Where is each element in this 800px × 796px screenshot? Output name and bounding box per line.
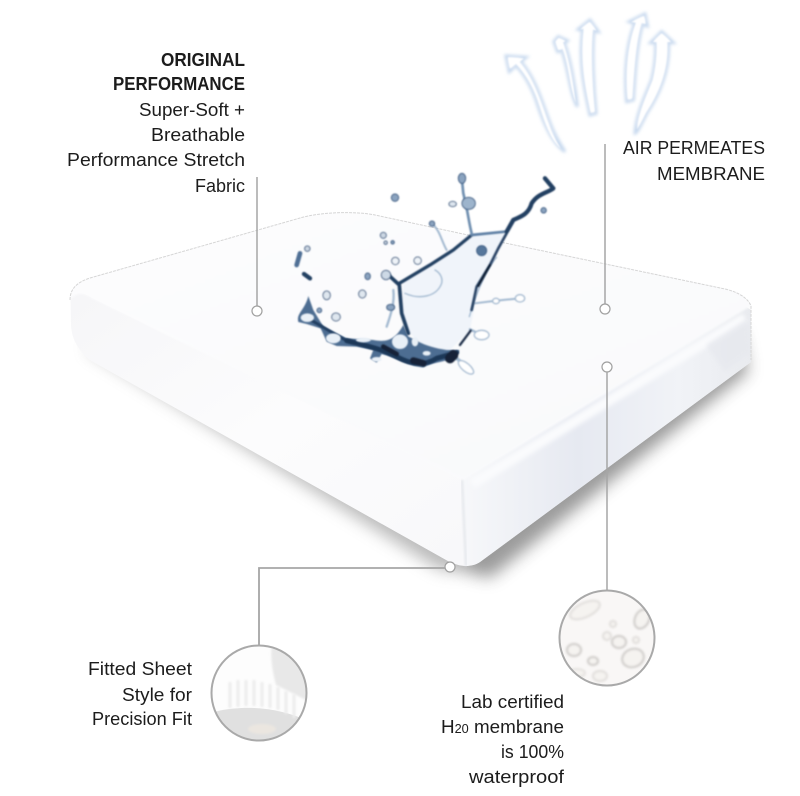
text: fitted sheet: [88, 658, 192, 729]
text: fabric description: Super-Soft +: [139, 99, 245, 120]
text: fabric description: Fabric: [195, 175, 245, 196]
text: air permeates membrane: [623, 137, 765, 184]
text: fitted sheet: Style for: [122, 684, 192, 705]
callout: waterproof membrane: [441, 362, 656, 787]
dot: mattress corner: [445, 562, 455, 572]
circle: droplets detail: [558, 590, 656, 688]
splash pale water fill: [402, 233, 507, 353]
leader line: fabric: [256, 177, 258, 306]
text: air permeates membrane: AIR PERMEATES: [623, 137, 765, 158]
leader line: fitted sheet: [259, 568, 445, 646]
text: waterproof membrane: H20 membrane: [441, 716, 564, 737]
text: fabric description: Performance Stretch: [67, 149, 245, 170]
callout: air permeates membrane: [600, 137, 765, 314]
text: waterproof membrane: [441, 691, 565, 787]
heading: original performance: [113, 49, 245, 94]
air arrows: [506, 14, 673, 152]
water splash: [297, 173, 553, 376]
splash light outline: [387, 223, 525, 376]
leader line: air: [604, 144, 606, 304]
mattress body: [70, 213, 751, 566]
dot: fabric: [252, 306, 262, 316]
text: air permeates membrane: MEMBRANE: [657, 163, 765, 184]
mattress: [70, 213, 751, 578]
splash highlights: [301, 313, 431, 362]
splash dark streams: [297, 178, 553, 363]
dot: membrane: [602, 362, 612, 372]
text: waterproof membrane: Lab certified: [461, 691, 564, 712]
text: waterproof membrane: is 100%: [501, 741, 564, 762]
circle outline: fitted sheet: [212, 646, 306, 740]
dot: air: [600, 304, 610, 314]
heading: original performance: ORIGINAL: [161, 49, 245, 70]
circle outline: droplets: [560, 590, 654, 686]
text: fitted sheet: Precision Fit: [92, 708, 192, 729]
text: fabric description: Breathable: [151, 124, 245, 145]
mattress right side: [462, 306, 751, 566]
splash droplets: [305, 173, 546, 321]
circle: fitted sheet detail: [216, 648, 306, 740]
callout: fitted sheet: [88, 562, 455, 745]
callout: original performance: [67, 49, 262, 316]
text: fitted sheet: Fitted Sheet: [88, 658, 192, 679]
mattress shadow right: [450, 330, 748, 578]
splash bottom body: [298, 296, 459, 367]
text: waterproof membrane: waterproof: [468, 766, 565, 787]
text: fabric description: [67, 99, 245, 196]
mattress shadow left: [88, 330, 466, 572]
mattress top edge: [70, 213, 751, 360]
mattress left side: [71, 293, 466, 566]
heading: original performance: PERFORMANCE: [113, 73, 245, 94]
mattress top face: [70, 213, 751, 480]
leader line: membrane: [606, 372, 608, 591]
